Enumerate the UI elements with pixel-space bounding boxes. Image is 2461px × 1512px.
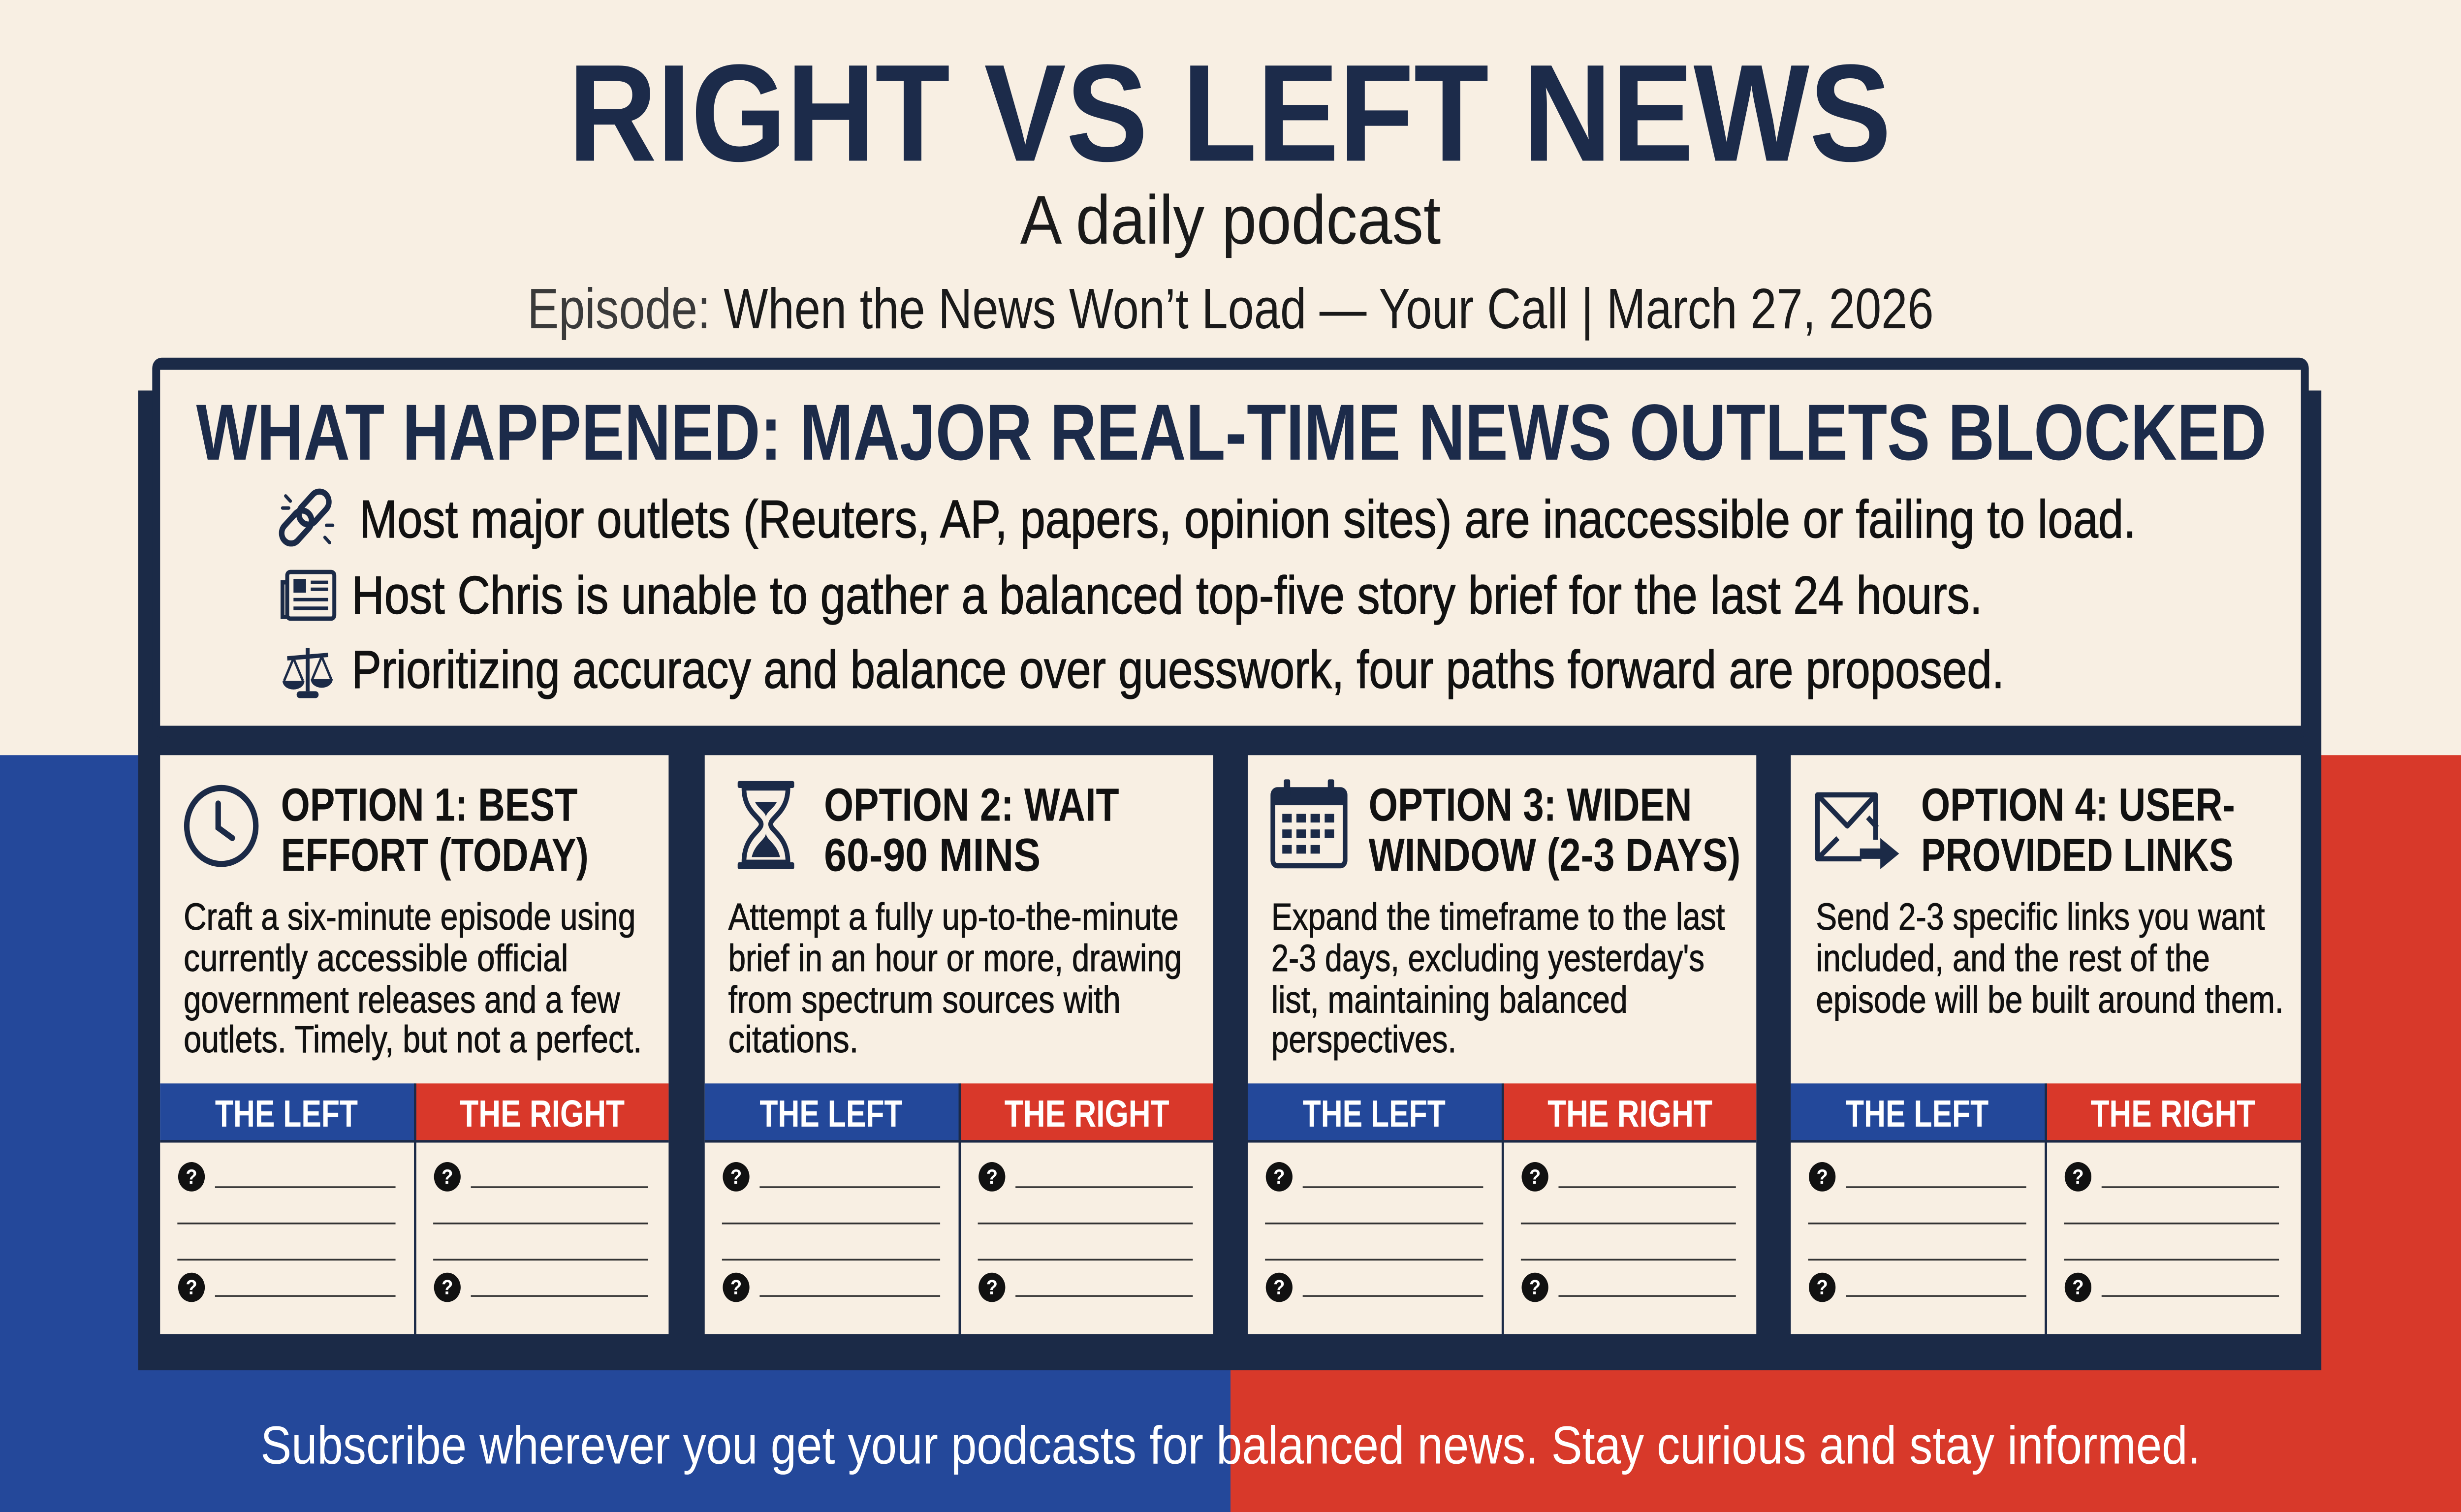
title: RIGHT VS LEFT NEWS [568,35,1891,190]
card title: PROVIDED LINKS [1921,829,2234,881]
panel: option 1 [160,755,668,1334]
left/right table: ? [1529,1276,1541,1299]
card body: government releases and a few [184,978,620,1021]
card title: OPTION 4: USER- [1921,779,2235,831]
icon: clock [187,788,256,864]
left/right table: ? [2072,1165,2084,1188]
left/right table [1248,1083,1756,1334]
left/right table [1791,1083,2301,1334]
card title: OPTION 3: WIDEN [1369,779,1692,831]
card title: EFFORT (TODAY) [281,829,589,881]
left/right table: THE RIGHT [460,1092,625,1135]
main frame [138,358,2321,1370]
left/right table: THE LEFT [215,1092,358,1135]
left/right table [160,1083,668,1334]
card body [184,895,642,1061]
card body: currently accessible official [184,937,568,979]
card title [1921,779,2235,881]
left/right table: ? [186,1276,197,1299]
card body: 2-3 days, excluding yesterday's [1271,937,1704,979]
panel: option 4 [1791,755,2301,1334]
left/right table: ? [1816,1165,1828,1188]
card title [824,779,1119,881]
left/right table: THE LEFT [1303,1092,1446,1135]
panel: option 2 [705,755,1213,1334]
icon: broken link [278,487,333,548]
episode line: Episode: When the News Won’t Load — Your Call | March 27, 2026 [527,277,1934,341]
card body [1271,895,1725,1061]
footer: Subscribe wherever you get your podcasts for balanced news. Stay curious and stay informed. [260,1416,2201,1476]
card body: outlets. Timely, but not a perfect. [184,1018,642,1061]
icon: newspaper [283,572,334,619]
icon: hourglass [738,781,794,869]
left/right table: THE RIGHT [1547,1092,1712,1135]
left/right table: ? [2072,1276,2084,1299]
card body: Send 2-3 specific links you want [1816,895,2265,938]
text: bullet 3: Prioritizing accuracy and balance over guesswork, four paths forward are proposed. [351,640,2004,699]
left/right table: ? [186,1165,197,1188]
card body [1816,895,2284,1021]
left/right table: THE RIGHT [2090,1092,2255,1135]
card body: perspectives. [1271,1018,1456,1061]
card title [281,779,589,881]
card body: Attempt a fully up-to-the-minute [728,895,1179,938]
card title [1369,779,1740,881]
left/right table [705,1083,1213,1334]
card title: 60-90 MINS [824,829,1041,881]
icon: envelope with arrow [1818,795,1899,869]
panel: option 3 [1248,755,1756,1334]
card body: Craft a six-minute episode using [184,895,635,938]
left/right table: ? [1273,1276,1285,1299]
left/right table: ? [730,1165,742,1188]
card body [728,895,1182,1061]
card body: brief in an hour or more, drawing [728,937,1182,979]
left/right table: THE LEFT [759,1092,903,1135]
left/right table: ? [730,1276,742,1299]
card title: OPTION 1: BEST [281,779,577,831]
card body: included, and the rest of the [1816,937,2210,979]
left/right table: ? [986,1276,998,1299]
panel: what happened [196,387,2267,699]
text: bullet 1: Most major outlets (Reuters, AP, papers, opinion sites) are inaccessible or failing to load. [359,490,2136,549]
card body: citations. [728,1018,858,1061]
card body: list, maintaining balanced [1271,978,1628,1021]
subtitle: A daily podcast [1020,182,1441,258]
left/right table: ? [442,1276,453,1299]
left/right table: ? [1816,1276,1828,1299]
icon: scales [283,648,333,698]
card title: OPTION 2: WAIT [824,779,1119,831]
left/right table: THE RIGHT [1005,1092,1169,1135]
card body: from spectrum sources with [728,978,1121,1021]
left/right table: THE LEFT [1846,1092,1988,1135]
icon: calendar [1273,779,1345,866]
left/right table: ? [1529,1165,1541,1188]
card body: Expand the timeframe to the last [1271,895,1725,938]
card title: WINDOW (2-3 DAYS) [1369,829,1740,881]
left/right table: ? [1273,1165,1285,1188]
card body: episode will be built around them. [1816,978,2284,1021]
left/right table: ? [442,1165,453,1188]
left/right table: ? [986,1165,998,1188]
heading: WHAT HAPPENED: MAJOR REAL-TIME NEWS OUTLETS BLOCKED [196,387,2267,476]
text: bullet 2: Host Chris is unable to gather a balanced top-five story brief for the last 24 hours. [351,566,1982,625]
